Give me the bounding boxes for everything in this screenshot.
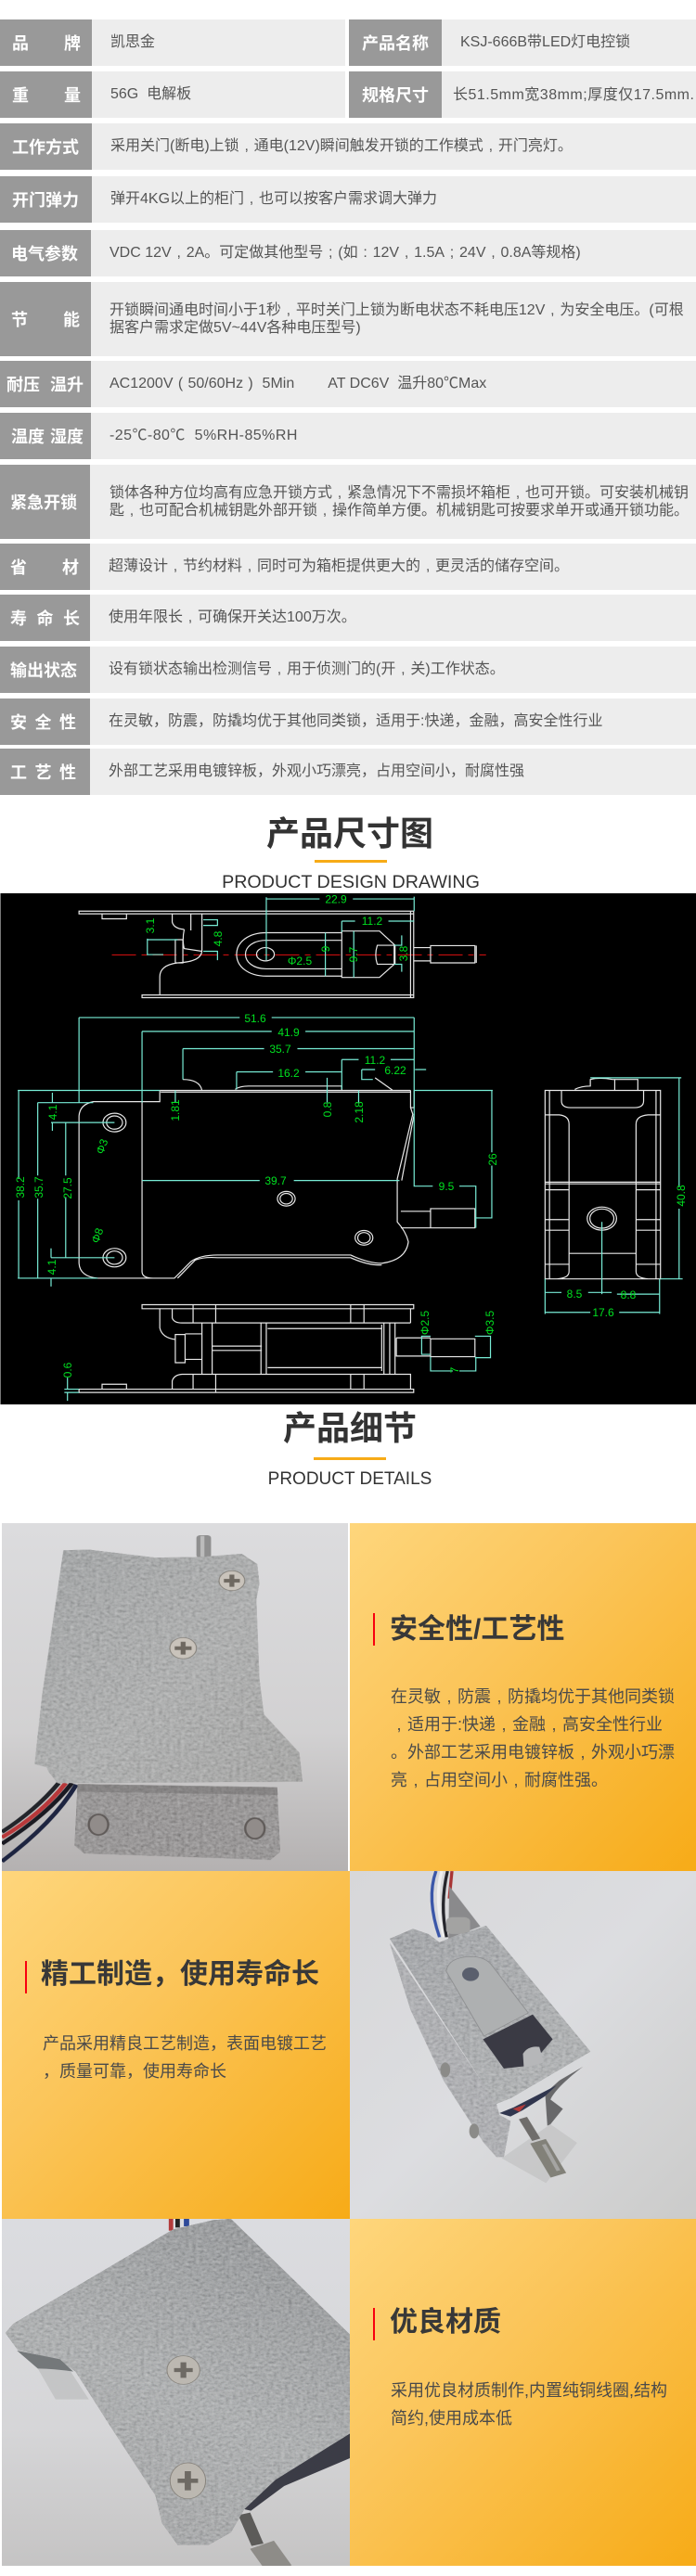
value: , — [489, 138, 493, 154]
dimension labels: 7 — [448, 1366, 461, 1373]
dimension labels: 9 — [319, 945, 332, 952]
white lip — [510, 2059, 583, 2108]
panel body: , — [551, 1715, 557, 1734]
dimension labels: 41.9 — [277, 1026, 300, 1039]
panel body: 。外部工艺采用电镀锌板 外观小巧漂 — [391, 1743, 675, 1762]
panel heading: 精工制造，使用寿命长 — [41, 1959, 319, 1990]
accent bar — [25, 1961, 27, 1993]
label: 耐压 — [6, 376, 40, 394]
panel body: , — [513, 1771, 518, 1789]
value: 匙 也可配合机械钥匙外部开锁 操作简单方便。机械钥匙可按要求单开或通开锁功能。 — [110, 503, 689, 519]
value — [90, 749, 696, 795]
dimension labels: 6.22 — [384, 1064, 406, 1077]
slot — [446, 1956, 528, 2036]
label: 工 — [10, 763, 27, 782]
label: 性 — [59, 763, 76, 782]
main plate — [34, 1550, 303, 1783]
panel body: , — [501, 1715, 507, 1734]
value: , — [244, 138, 249, 154]
label: weight: 量 — [64, 86, 81, 105]
label: 长 — [63, 609, 80, 628]
label: 寿 — [10, 609, 27, 628]
value: , — [188, 609, 192, 625]
value: 弹开4KG以上的柜门 也可以按客户需求调大弹力 — [110, 191, 437, 207]
spec row: weight and dimensions — [0, 71, 696, 118]
rear tab — [448, 1886, 481, 1939]
side screws — [441, 2062, 450, 2077]
dimension labels: 0.6 — [61, 1362, 74, 1378]
dimension labels: Φ3 — [94, 1137, 110, 1156]
label: brand: 牌 — [64, 34, 81, 53]
value — [91, 230, 696, 276]
dimension labels: Φ2.5 — [419, 1311, 432, 1335]
value: product name: KSJ-666B带LED灯电控锁 — [460, 34, 630, 50]
panel body: , — [413, 1771, 418, 1789]
dimension labels — [14, 892, 688, 1378]
underside shade — [244, 2433, 350, 2511]
label: 命 — [37, 609, 54, 628]
interior with wires — [499, 2085, 557, 2117]
spec row: electrical parameters — [0, 230, 696, 276]
label: product name: 产品名称 — [362, 34, 429, 53]
value: weight — [92, 71, 345, 118]
lower mounting plate — [74, 1784, 280, 1860]
label — [0, 361, 91, 407]
accent bar — [373, 2308, 375, 2340]
spec row: long life — [0, 595, 696, 641]
label: 性 — [59, 713, 76, 732]
value — [90, 544, 696, 590]
value: 在灵敏，防震，防撬均优于其他同类锁，适用于:快递，金融，高安全性行业 — [109, 713, 602, 729]
value: ; — [329, 245, 332, 261]
slot hole — [462, 1967, 479, 1981]
panel body: 在灵敏 防震 防撬均优于其他同类锁 — [391, 1687, 675, 1706]
photo: lock close-up with two screws — [2, 2219, 350, 2566]
spec row: craftsmanship — [0, 749, 696, 795]
value — [92, 176, 696, 223]
dimension labels: 0.8 — [321, 1101, 334, 1117]
dimension labels: 11.2 — [362, 915, 383, 928]
spec row: brand and product name — [0, 19, 696, 66]
screws — [167, 2356, 200, 2384]
shadow — [502, 2124, 577, 2183]
wires — [166, 2219, 175, 2231]
value — [91, 282, 696, 356]
label — [0, 176, 92, 223]
label: 全 — [35, 713, 52, 732]
label: product name — [349, 19, 442, 66]
label: 安 — [10, 713, 27, 732]
dimension labels: 35.7 — [269, 1043, 291, 1056]
value — [90, 647, 696, 693]
dimension labels: 9.5 — [439, 1180, 455, 1193]
dimension labels: Φ8 — [89, 1226, 106, 1245]
right bracket — [545, 2067, 583, 2126]
value: , — [323, 503, 327, 519]
dimension labels: 8.8 — [621, 1288, 637, 1301]
label: 能 — [63, 311, 80, 329]
value: , — [250, 191, 253, 207]
spec row: energy saving — [0, 282, 696, 356]
value: VDC 12V 2A。可定做其他型号 (如 12V 1.5A 24V 0.8A等规格) — [110, 245, 581, 261]
value: product name — [442, 19, 696, 66]
spec row: working mode — [0, 123, 696, 170]
panel body: 产品采用精良工艺制造，表面电镀工艺 — [43, 2034, 327, 2053]
heading accent bar — [314, 1457, 386, 1460]
dimension labels: 39.7 — [264, 1174, 287, 1187]
label: dimensions — [349, 71, 442, 118]
pin — [197, 1535, 211, 1557]
notch lip — [17, 2351, 73, 2372]
value: AC1200V 50/60Hz 5Min AT DC6V 温升80℃Max — [110, 376, 486, 391]
panel body — [391, 2381, 667, 2428]
value: , — [130, 503, 134, 519]
label: 电气参数 — [11, 245, 78, 263]
spec row: withstand voltage and temperature rise — [0, 361, 696, 407]
value — [90, 465, 696, 539]
value: , — [491, 245, 496, 261]
spec row: safety — [0, 698, 696, 745]
panel: precision manufacture — [2, 1871, 350, 2219]
heading: product details: 产品细节 — [283, 1409, 417, 1447]
label — [0, 647, 90, 693]
dimension labels: Φ2.5 — [288, 955, 312, 968]
value: , — [550, 302, 555, 317]
dimension labels: 4.1 — [46, 1104, 59, 1120]
photo: lock top view with wires — [2, 1523, 348, 1871]
value: 超薄设计 节约材料 同时可为箱柜提供更大的 更灵活的储存空间。 — [109, 558, 569, 574]
panel: quality materials — [350, 2219, 696, 2566]
dimension labels: 3.1 — [144, 917, 157, 933]
pin — [244, 2514, 258, 2544]
spec row: material saving — [0, 544, 696, 590]
value: dimensions: 长51.5mm宽38mm;厚度仅17.5mm. — [453, 87, 694, 103]
pin — [523, 2118, 536, 2140]
panel body: 采用优良材质制作,内置纯铜线圈,结构 — [391, 2381, 667, 2400]
value: 据客户需求定做5V~44V各种电压型号) — [110, 320, 361, 336]
screws — [219, 1570, 245, 1591]
label: brand — [0, 19, 92, 66]
panel body: ，质量可靠，使用寿命长 — [43, 2062, 226, 2081]
label: 湿度 — [50, 428, 84, 446]
label: 节 — [11, 311, 28, 329]
dimension lines — [18, 897, 683, 1401]
label — [0, 698, 90, 745]
dimension labels: 8.5 — [567, 1288, 583, 1301]
dimension labels: 26 — [486, 1153, 499, 1166]
dimension labels: 9.7 — [347, 946, 360, 962]
spec row: spring force — [0, 176, 696, 223]
panel heading: 优良材质 — [390, 2307, 501, 2338]
panel heading: 安全性/工艺性 — [390, 1614, 564, 1645]
accent bar — [373, 1613, 375, 1646]
spec row: emergency unlock — [0, 465, 696, 539]
label — [0, 465, 90, 539]
heading: product size drawing: 产品尺寸图 — [266, 814, 433, 852]
panel: safety and craftsmanship — [350, 1523, 696, 1871]
spec row: temperature and humidity — [0, 413, 696, 459]
body side face — [390, 1943, 510, 2157]
value: , — [248, 558, 251, 574]
body front face — [390, 1926, 590, 2104]
label: 省 — [10, 558, 27, 577]
label: 输出状态 — [10, 661, 77, 680]
value: , — [176, 245, 181, 261]
heading accent bar — [315, 860, 387, 863]
wires — [432, 1871, 452, 1937]
lower tab — [38, 2365, 89, 2400]
panel body: 简约,使用成本低 — [391, 2409, 512, 2428]
label — [0, 230, 91, 276]
value: weight: 56G 电解板 — [110, 86, 191, 102]
label: brand: 品 — [12, 34, 29, 53]
label: weight: 重 — [12, 86, 29, 105]
label — [0, 123, 92, 170]
panel body: , — [446, 1687, 451, 1706]
label: 艺 — [35, 763, 52, 782]
value: -25℃-80℃ 5%RH-85%RH — [110, 428, 298, 443]
value: dimensions — [442, 71, 696, 118]
dimension labels: 17.6 — [592, 1306, 614, 1319]
label: dimensions: 规格尺寸 — [362, 86, 429, 105]
value — [91, 413, 696, 459]
value: 开锁瞬间通电时间小于1秒 平时关门上锁为断电状态不耗电压12V 为安全电压。(可根 — [110, 302, 684, 317]
label — [0, 749, 90, 795]
value: 锁体各种方位均高有应急开锁方式 紧急情况下不需损坏箱柜 也可开锁。可安装机械钥 — [110, 484, 689, 501]
dimension labels: 4.8 — [212, 930, 225, 946]
spec row: output status — [0, 647, 696, 693]
wires — [2, 1783, 76, 1862]
value: , — [174, 558, 177, 574]
dimension labels: 16.2 — [277, 1067, 300, 1080]
centre line — [112, 954, 486, 955]
value: , — [277, 661, 281, 677]
value: 采用关门(断电)上锁 通电(12V)瞬间触发开锁的工作模式 开门亮灯。 — [110, 138, 573, 154]
value: , — [405, 245, 408, 261]
panel body: 亮 占用空间小 耐腐性强。 — [391, 1771, 608, 1789]
chart: technical dimension drawing — [0, 893, 696, 1404]
label: weight — [0, 71, 92, 118]
value: 设有锁状态输出检测信号 用于侦测门的(开 关)工作状态。 — [109, 661, 505, 677]
value — [90, 698, 696, 745]
dimension labels: 51.6 — [244, 1012, 266, 1025]
panel body: , — [396, 1715, 401, 1734]
dimension labels: 27.5 — [61, 1177, 74, 1199]
value: brand: 凯思金 — [110, 34, 155, 50]
heading: English subtitle: PRODUCT DESIGN DRAWING — [222, 872, 480, 892]
value: ) — [248, 376, 253, 391]
label: 材 — [62, 558, 79, 577]
value: : — [363, 245, 367, 261]
label — [0, 413, 91, 459]
value — [91, 361, 696, 407]
value — [90, 595, 696, 641]
value: , — [338, 484, 342, 501]
drawing outlines — [79, 911, 661, 1392]
value: brand — [92, 19, 345, 66]
panel body — [391, 1687, 675, 1789]
label: 温度 — [11, 428, 45, 446]
value: , — [426, 558, 430, 574]
value: , — [287, 302, 290, 317]
value: ( — [178, 376, 183, 391]
label: 工作方式 — [12, 138, 79, 157]
dimension labels: 38.2 — [14, 1176, 27, 1198]
value: 外部工艺采用电镀锌板，外观小巧漂亮，占用空间小，耐腐性强 — [109, 763, 524, 779]
panel body: , — [496, 1687, 501, 1706]
value: 使用年限长 可确保开关达100万次。 — [109, 609, 356, 625]
window — [483, 2015, 553, 2069]
label — [0, 544, 90, 590]
dimension labels: 11.2 — [365, 1054, 386, 1067]
dimension labels: 1.81 — [169, 1099, 182, 1121]
panel body: 适用于:快递 金融 高安全性行业 — [407, 1715, 663, 1734]
label — [0, 595, 90, 641]
dimension labels: 40.8 — [675, 1185, 688, 1207]
heading: English subtitle: PRODUCT DETAILS — [268, 1469, 432, 1489]
label — [0, 282, 91, 356]
label: 开门弹力 — [12, 191, 79, 210]
dimension labels: 35.7 — [32, 1176, 45, 1198]
value: ; — [450, 245, 454, 261]
dimension labels: 2.18 — [353, 1101, 366, 1123]
value: , — [401, 661, 406, 677]
plate — [6, 2219, 350, 2544]
label: 温升 — [50, 376, 84, 394]
dimension labels: 3.8 — [397, 945, 410, 961]
dimension labels: 4.1 — [45, 1259, 58, 1275]
panel body — [43, 2034, 327, 2081]
photo: lock angled view with window and pin — [350, 1871, 696, 2219]
panel body: , — [580, 1743, 585, 1762]
label: 紧急开锁 — [10, 493, 77, 512]
value — [92, 123, 696, 170]
value: , — [516, 484, 520, 501]
dimension labels: Φ3.5 — [483, 1311, 496, 1335]
